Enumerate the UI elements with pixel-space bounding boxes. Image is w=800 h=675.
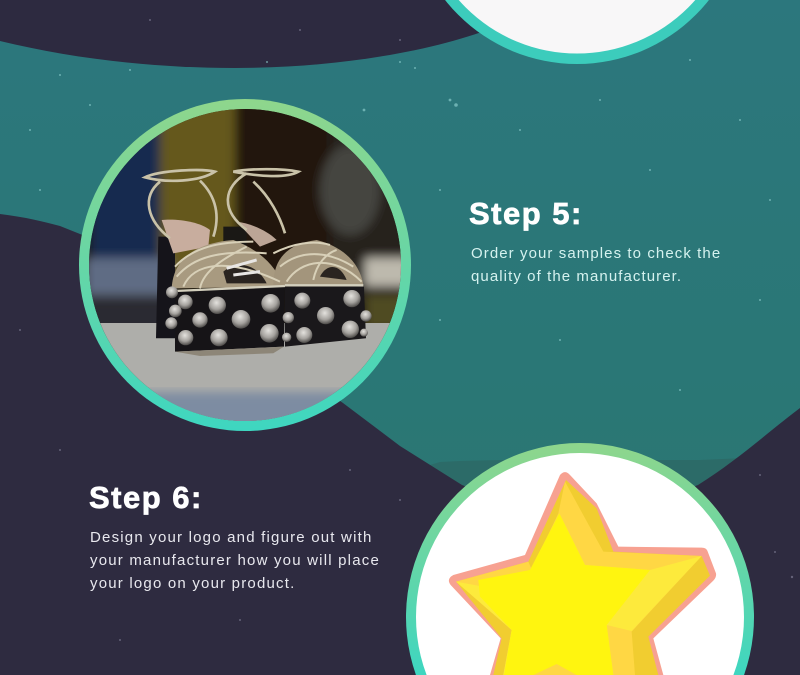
- platforms: [175, 287, 285, 352]
- body: step 5: [471, 245, 721, 285]
- star light faces: [456, 513, 702, 675]
- text block: step 6: [89, 480, 380, 592]
- heading: step 5: Step 5:: [469, 196, 583, 231]
- photo circle: platform sandals: [79, 99, 411, 431]
- body: step 6: your logo on your product.: [90, 575, 295, 592]
- text block: step 5: [469, 196, 721, 285]
- heels: [156, 237, 175, 338]
- body: step 6: your manufacturer how you will place: [90, 552, 380, 569]
- star bevel faces: [456, 482, 702, 675]
- body: step 5: quality of the manufacturer.: [471, 268, 682, 285]
- star side faces: [456, 480, 710, 675]
- ankle straps: [145, 169, 298, 238]
- distant treeline: [420, 458, 745, 495]
- icon: yellow star: [449, 472, 716, 675]
- insoles: [162, 220, 210, 253]
- heading: step 6: Step 6:: [89, 480, 203, 515]
- star front face: [478, 513, 650, 675]
- body: step 6: [90, 529, 380, 592]
- metal studs: [165, 286, 372, 346]
- body: step 6: Design your logo and figure out with: [90, 529, 373, 546]
- star bottom notch: [533, 664, 577, 675]
- star specks: [29, 59, 771, 391]
- body: step 5: Order your samples to check the: [471, 245, 721, 262]
- lower dark hill: [0, 214, 800, 675]
- vamp straps: [172, 240, 283, 288]
- star outline: [449, 472, 716, 675]
- top dark hill: [0, 0, 500, 68]
